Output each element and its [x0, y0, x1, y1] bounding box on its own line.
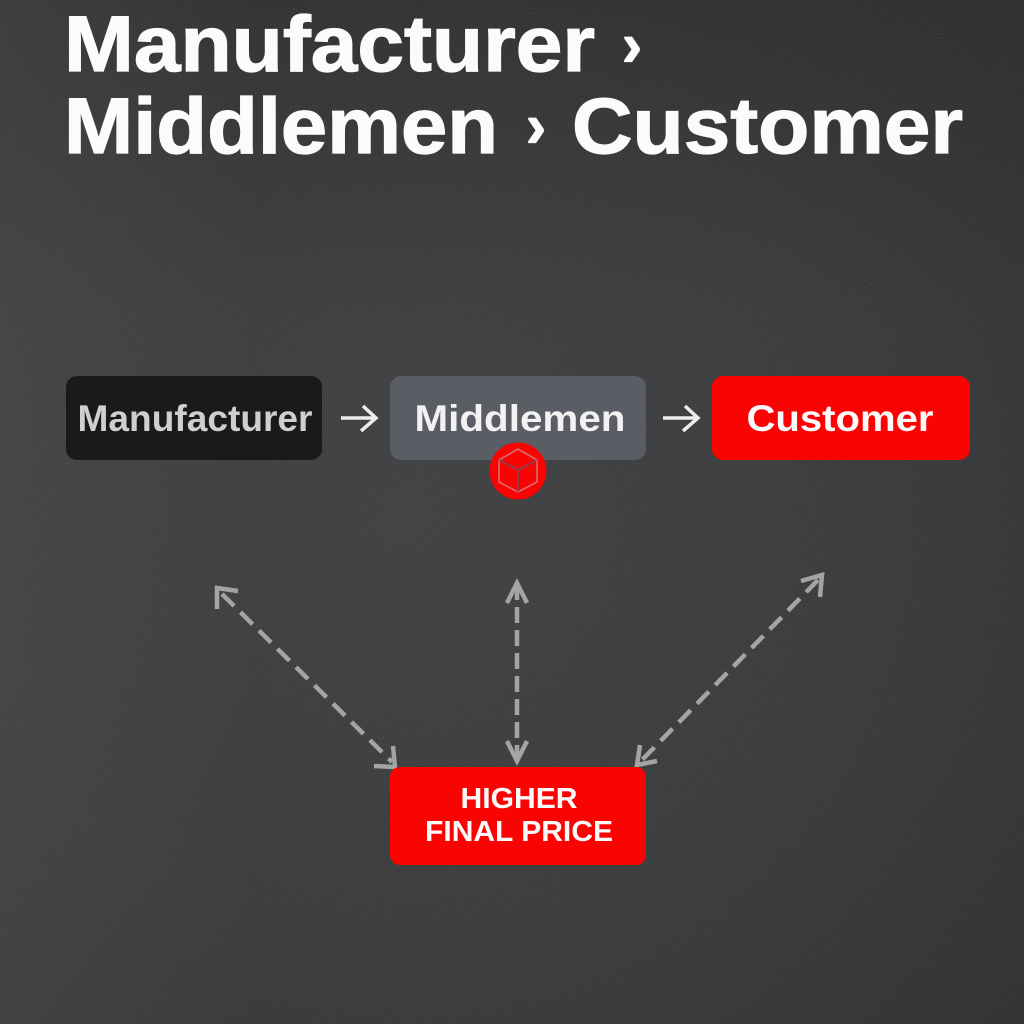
box: customer: Customer — [746, 398, 934, 439]
title — [64, 0, 963, 170]
box: customer — [712, 376, 970, 460]
title: › — [526, 92, 546, 161]
callout: higher final price: FINAL PRICE — [425, 816, 613, 848]
box: middlemen — [390, 376, 646, 460]
box: manufacturer — [66, 376, 322, 460]
arrow: manufacturer to middlemen — [341, 406, 376, 431]
arrow: left dashed double arrow — [217, 588, 395, 767]
title: › — [622, 11, 642, 80]
icon: red cube badge — [490, 442, 546, 500]
title: Middlemen — [64, 81, 498, 170]
arrow: centre dashed double arrow — [507, 583, 527, 761]
title: Customer — [572, 81, 963, 170]
box: manufacturer: Manufacturer — [78, 398, 312, 439]
box: middlemen: Middlemen — [414, 398, 626, 439]
arrow: right dashed double arrow — [637, 575, 822, 765]
title: Manufacturer — [64, 0, 595, 88]
callout: higher final price — [390, 767, 646, 865]
arrow: middlemen to customer — [663, 406, 698, 431]
callout: higher final price: HIGHER — [460, 783, 578, 815]
